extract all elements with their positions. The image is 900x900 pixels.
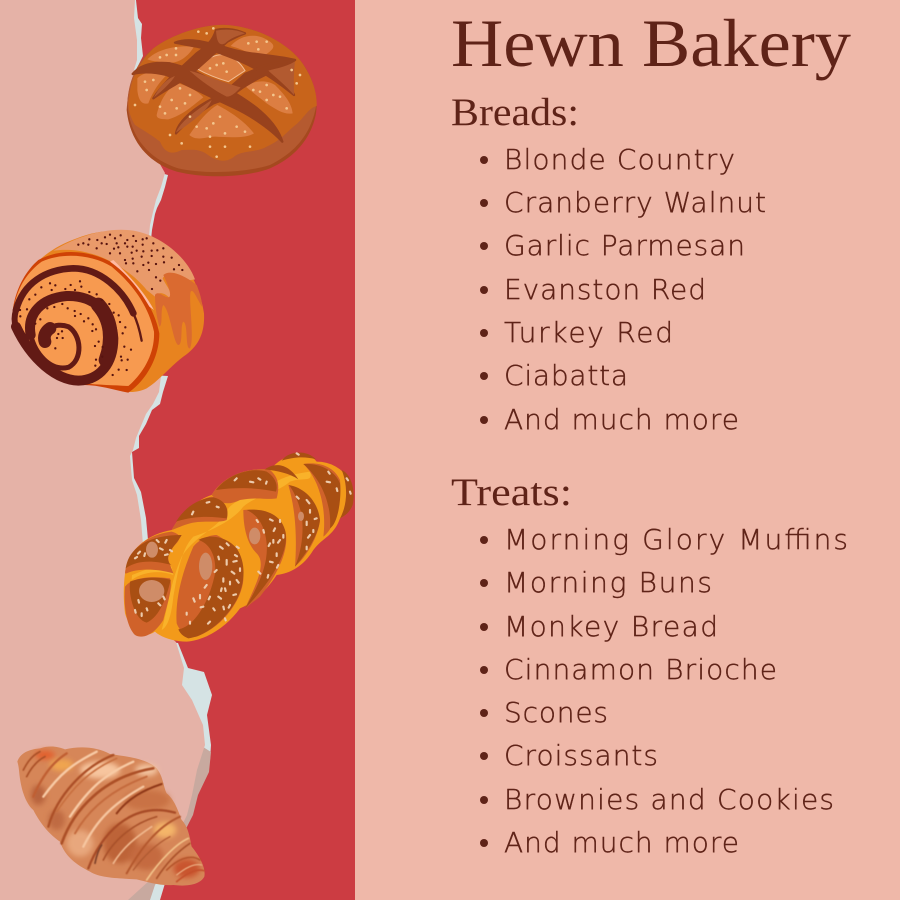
panel: text background <box>355 0 900 900</box>
list: breads: Blonde Country <box>504 143 735 176</box>
list: breads: Turkey Red <box>504 316 673 349</box>
loaf crust highlights <box>137 36 293 138</box>
torn paper edge: grey shadow <box>122 745 211 900</box>
list: breads: Evanston Red <box>504 273 706 306</box>
list: breads <box>480 143 766 436</box>
list: treats: Cinnamon Brioche <box>504 653 777 686</box>
list: breads: Ciabatta <box>504 359 628 392</box>
list: treats <box>480 523 848 859</box>
list: treats: Croissants <box>504 739 658 772</box>
list: breads: Cranberry Walnut <box>504 186 766 219</box>
loaf slash mid-tone <box>154 30 295 133</box>
loaf flour specks <box>135 28 300 157</box>
panel: red stripe <box>130 0 355 900</box>
icon: watercolour croissant <box>17 746 205 886</box>
list: breads: Garlic Parmesan <box>504 229 745 262</box>
swirl lines <box>14 268 142 381</box>
braid plaits mid tone <box>125 463 340 637</box>
croissant layer strokes <box>23 752 204 882</box>
title: Hewn Bakery <box>451 5 851 81</box>
icon: braided challah loaf <box>124 452 354 642</box>
list: treats: Scones <box>504 696 608 729</box>
braid sesame seeds <box>135 453 351 624</box>
list: treats: Morning Glory Muffins <box>504 523 848 556</box>
icon: round scored loaf <box>127 25 317 176</box>
torn paper edge: white tear <box>100 0 212 900</box>
list: breads: And much more <box>504 403 739 436</box>
list: treats: Monkey Bread <box>504 610 718 643</box>
roll poppy seeds <box>20 235 182 375</box>
list: treats: Morning Buns <box>504 566 712 599</box>
croissant tonal washes <box>31 750 200 878</box>
braid glazed spots <box>139 512 304 602</box>
panel: torn paper <box>0 0 205 900</box>
icon: cinnamon swirl roll <box>13 230 204 393</box>
list: treats: Brownies and Cookies <box>504 783 834 816</box>
braid lighter plaits <box>162 472 311 630</box>
heading: treats: Treats: <box>451 471 572 514</box>
list: treats: And much more <box>504 826 739 859</box>
braid plaits dark baked tone <box>126 452 354 638</box>
heading: breads: Breads: <box>451 91 579 134</box>
loaf score slashes <box>133 29 295 142</box>
